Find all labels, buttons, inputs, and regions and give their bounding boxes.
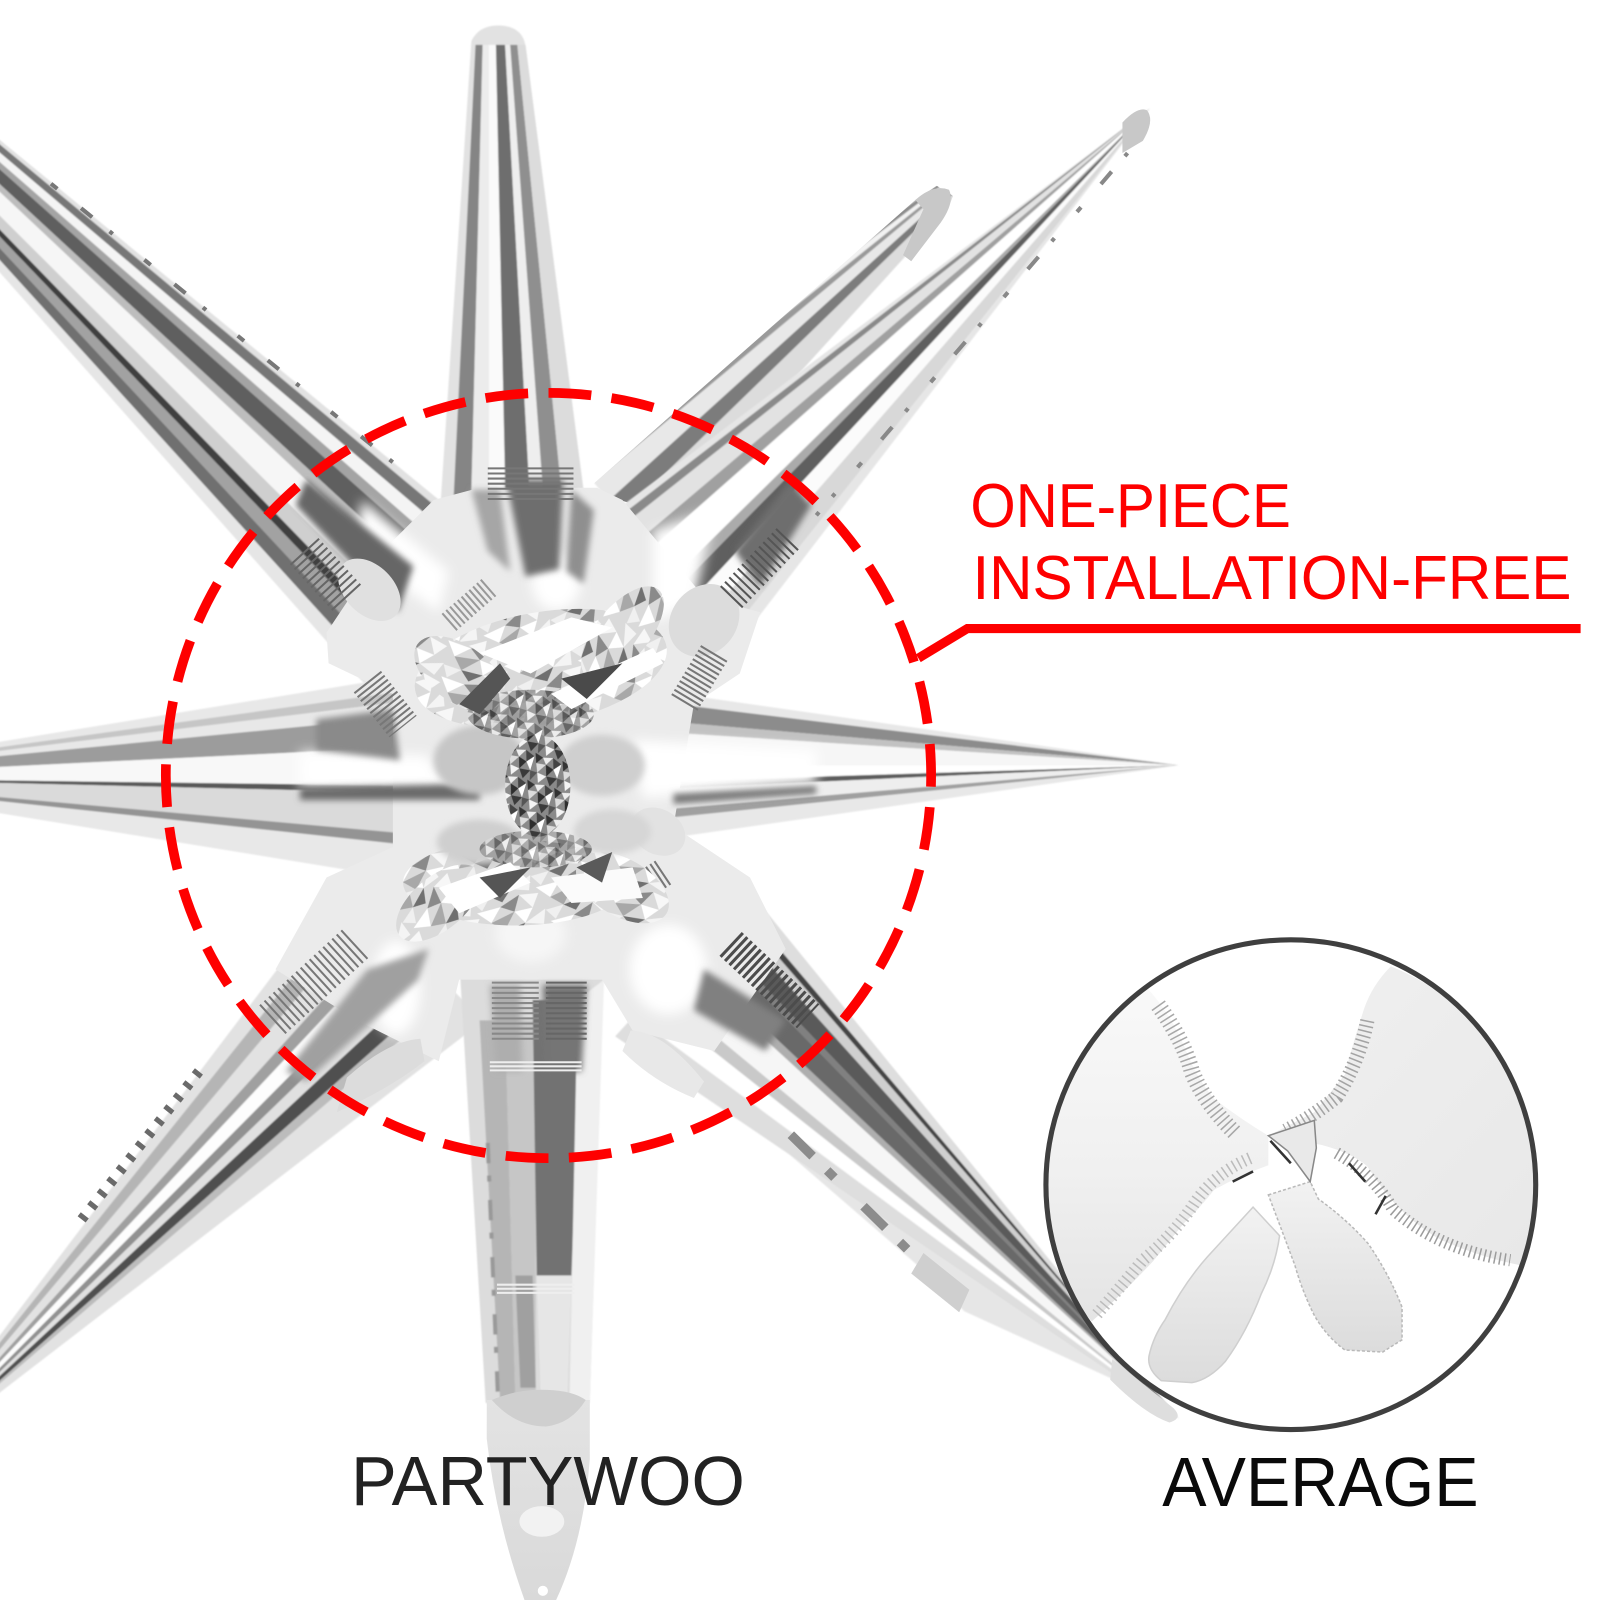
arm fringe specks: lower left	[82, 1071, 199, 1219]
arm: short rear upper right	[594, 186, 953, 502]
arm: right	[607, 684, 1179, 847]
foil pleats at arm necks	[269, 467, 808, 1294]
long foil facets	[439, 617, 663, 913]
lens outline	[1046, 940, 1536, 1430]
arm: bottom	[459, 959, 604, 1403]
silver starburst balloon	[0, 0, 1245, 1600]
lens: knot	[1268, 1120, 1316, 1182]
label: partywoo: PARTYWOO	[351, 1442, 745, 1520]
callout: one-piece installation-free: INSTALLATION-FREE	[972, 544, 1571, 613]
balloon body core	[269, 467, 816, 1294]
arm: lower right	[615, 890, 1245, 1491]
arm fringe pieces: lower right	[791, 1135, 1178, 1422]
body highlights	[300, 500, 816, 1035]
arm tip: short rear arm cap	[903, 188, 951, 261]
lens: wrinkled edges	[1097, 1005, 1510, 1314]
leader line from circle to callout	[918, 629, 1581, 658]
balloon inflation tab	[487, 1390, 590, 1600]
callout: one-piece installation-free	[970, 472, 1571, 613]
arm: lower left	[0, 882, 484, 1542]
callout: one-piece installation-free: ONE-PIECE	[970, 472, 1291, 541]
body shadows	[286, 480, 816, 1082]
arm: top	[439, 25, 589, 531]
arm: left	[0, 661, 495, 894]
comparison lens: average balloon	[1035, 940, 1536, 1430]
lens: left foil lobe	[1048, 1028, 1268, 1322]
dashed red circle highlight	[166, 393, 931, 1158]
arm: upper left	[0, 0, 521, 708]
lens: right foil lobe	[1268, 966, 1535, 1265]
arm tip: long upper right cap	[1122, 109, 1150, 153]
arm: long upper right	[582, 40, 1217, 671]
arm fringe specks: upper left	[51, 184, 420, 485]
crumpled foil centre	[383, 573, 681, 956]
lens: left lower petal	[1149, 1207, 1280, 1383]
arm fringe specks: long upper right	[816, 153, 1128, 515]
label: average: AVERAGE	[1162, 1443, 1479, 1521]
pale bulbs at arm necks	[326, 547, 754, 1112]
lens: right lower petal	[1268, 1182, 1402, 1352]
